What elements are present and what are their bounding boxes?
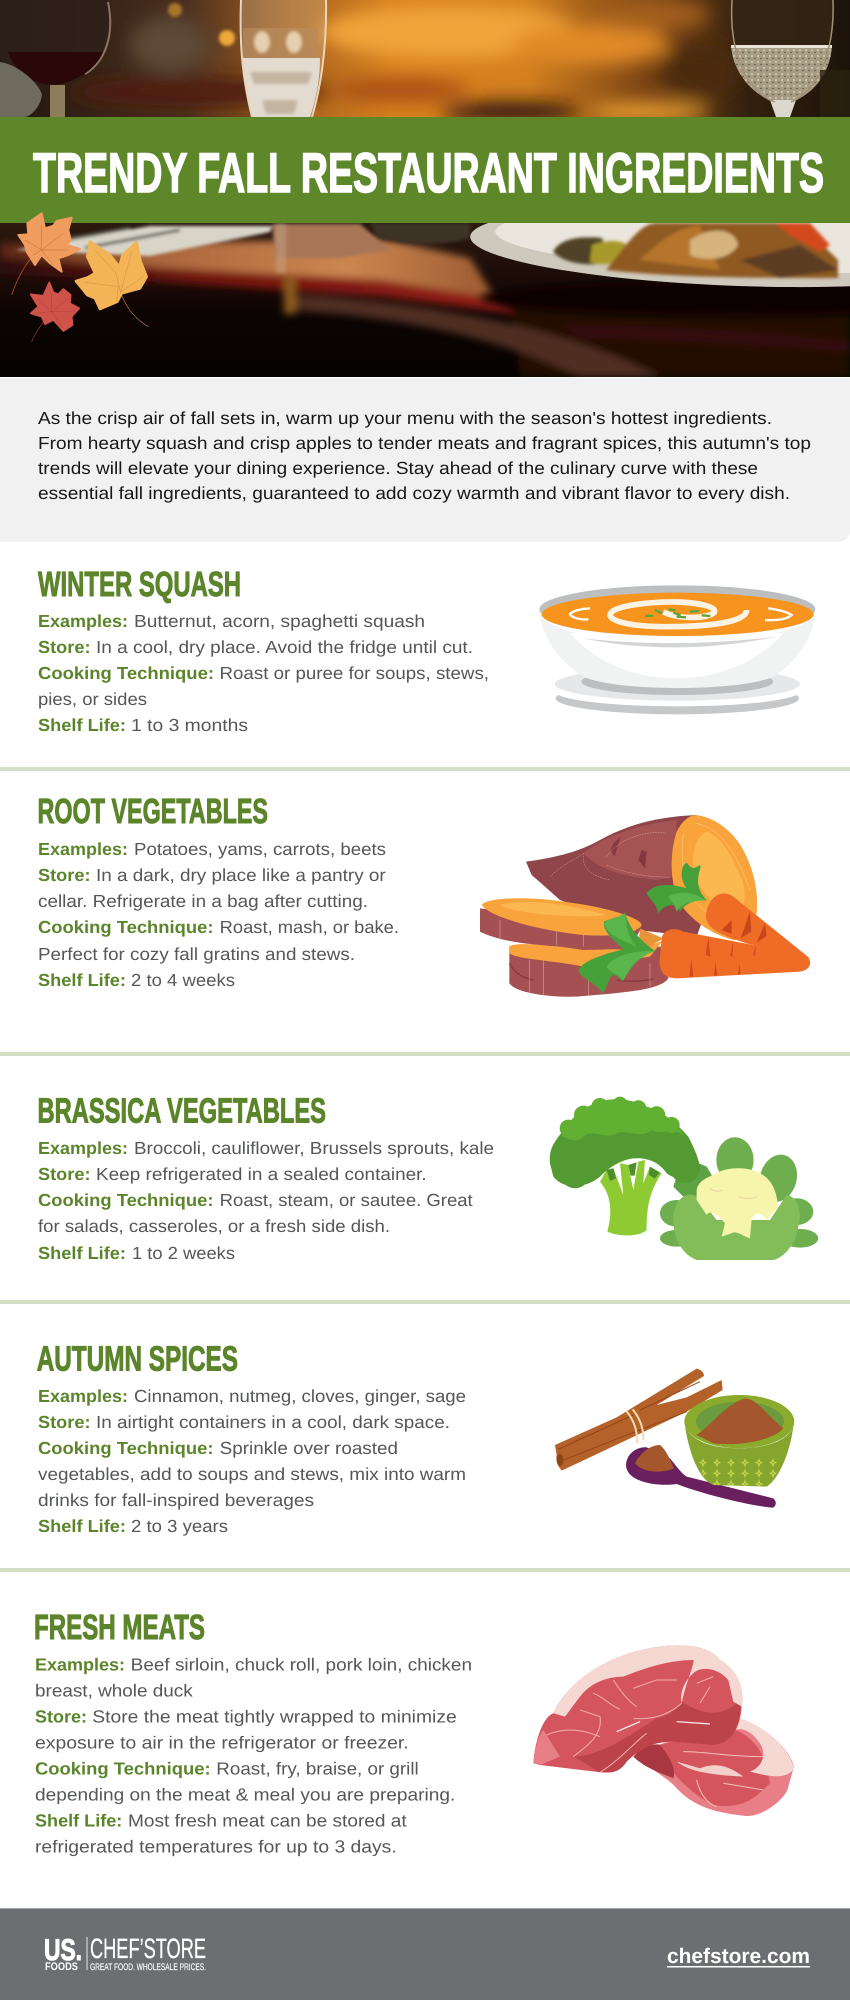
details: Examples: <box>38 839 128 859</box>
water glass right <box>731 0 833 117</box>
logo: US Foods Chef'Store: CHEF’STORE <box>90 1933 206 1964</box>
details <box>38 1138 494 1263</box>
logo: US Foods Chef'Store: FOODS <box>45 1961 78 1973</box>
website link: chefstore.com <box>667 1945 810 1968</box>
details: Broccoli, cauliflower, Brussels sprouts, kale <box>134 1138 494 1158</box>
details: Examples: <box>38 1386 128 1406</box>
details: Shelf Life: <box>38 1516 126 1536</box>
section: fresh meats <box>34 1608 794 1857</box>
slice front <box>480 908 642 950</box>
details: Cooking Technique: <box>38 917 214 937</box>
orange maple leaf <box>12 213 80 295</box>
section: brassica vegetables <box>38 1092 818 1263</box>
details: Shelf Life: <box>35 1811 122 1831</box>
details: refrigerated temperatures for up to 3 days. <box>35 1837 397 1857</box>
details <box>35 1655 472 1857</box>
cauliflower back leaves <box>660 1137 818 1248</box>
cinnamon sticks <box>555 1369 723 1471</box>
hero photo: restaurant table <box>0 0 850 377</box>
water glass centre <box>241 0 326 117</box>
details: 1 to 3 months <box>131 715 248 735</box>
intro text: From hearty squash and crisp apples to tender meats and fragrant spices, this autumn's top <box>38 433 811 453</box>
details: In a cool, dry place. Avoid the fridge until cut. <box>96 637 473 657</box>
icon: cinnamon and spice bowl <box>555 1369 794 1508</box>
front steak <box>533 1645 742 1773</box>
details: Cooking Technique: <box>38 1190 214 1210</box>
details: In airtight containers in a cool, dark space. <box>96 1412 450 1432</box>
divider <box>0 1300 850 1304</box>
icon: soup bowl <box>539 585 816 714</box>
details: Store: <box>38 637 90 657</box>
details: Examples: <box>38 611 128 631</box>
details: Cinnamon, nutmeg, cloves, ginger, sage <box>134 1386 466 1406</box>
title band <box>0 117 850 223</box>
heading: AUTUMN SPICES <box>37 1340 238 1379</box>
details: exposure to air in the refrigerator or freezer. <box>35 1733 409 1753</box>
spice bowl <box>684 1395 794 1448</box>
autumn leaves <box>12 213 148 342</box>
table surface <box>0 240 850 377</box>
details: Roast, mash, or bake. <box>220 917 399 937</box>
intro text <box>38 408 811 503</box>
divider <box>0 767 850 771</box>
sweet potato <box>526 815 713 937</box>
details: Shelf Life: <box>38 715 126 735</box>
details: for salads, casseroles, or a fresh side dish. <box>38 1216 390 1236</box>
details: Roast or puree for soups, stews, <box>220 663 489 683</box>
intro panel <box>0 378 850 542</box>
details: Store the meat tightly wrapped to minimize <box>92 1707 457 1727</box>
details: drinks for fall-inspired beverages <box>38 1490 314 1510</box>
logo: US Foods Chef'Store: US. <box>44 1934 82 1967</box>
details: Cooking Technique: <box>38 663 214 683</box>
spoon <box>626 1447 776 1508</box>
details: Shelf Life: <box>38 1243 126 1263</box>
wine glass left <box>0 0 111 117</box>
details: Butternut, acorn, spaghetti squash <box>134 611 425 631</box>
details: Store: <box>38 1164 90 1184</box>
plate <box>470 223 850 318</box>
divider <box>0 1568 850 1572</box>
details: Roast, fry, braise, or grill <box>216 1759 419 1779</box>
details <box>38 1386 466 1536</box>
details: Roast, steam, or sautee. Great <box>220 1190 473 1210</box>
details: Examples: <box>35 1655 125 1675</box>
heading: ROOT VEGETABLES <box>38 792 268 831</box>
napkin and cutlery <box>15 223 470 273</box>
details: Most fresh meat can be stored at <box>128 1811 407 1831</box>
section: winter squash <box>38 565 816 735</box>
details: cellar. Refrigerate in a bag after cutting. <box>38 891 368 911</box>
section: autumn spices <box>37 1340 794 1536</box>
intro text: trends will elevate your dining experience. Stay ahead of the culinary curve with these <box>38 458 758 478</box>
icon: raw steaks <box>533 1645 794 1816</box>
yellow leaf <box>76 242 148 327</box>
details: Store: <box>35 1707 87 1727</box>
intro text: As the crisp air of fall sets in, warm up your menu with the season's hottest ingredients. <box>38 408 772 428</box>
details: In a dark, dry place like a pantry or <box>96 865 386 885</box>
photo top: glasses and warm bokeh <box>0 0 850 122</box>
details: depending on the meat & meal you are preparing. <box>35 1785 455 1805</box>
intro text: essential fall ingredients, guaranteed to add cozy warmth and vibrant flavor to every dish. <box>38 483 790 503</box>
details <box>38 839 399 990</box>
details: vegetables, add to soups and stews, mix into warm <box>38 1464 466 1484</box>
details: pies, or sides <box>38 689 147 709</box>
details: 2 to 4 weeks <box>131 970 235 990</box>
logo: US Foods Chef'Store <box>44 1933 206 1973</box>
heading: BRASSICA VEGETABLES <box>38 1092 326 1130</box>
photo bottom: table and plate <box>0 223 850 377</box>
icon: broccoli and cauliflower <box>550 1097 818 1260</box>
details: Shelf Life: <box>38 970 126 990</box>
heading: WINTER SQUASH <box>38 565 241 604</box>
icon: sweet potato and carrots <box>480 815 810 997</box>
slice back <box>509 947 668 997</box>
details: 1 to 2 weeks <box>132 1243 235 1263</box>
details: Store: <box>38 1412 90 1432</box>
details: Examples: <box>38 1138 128 1158</box>
broccoli <box>550 1097 700 1235</box>
details: Potatoes, yams, carrots, beets <box>134 839 386 859</box>
food on plate <box>553 223 838 278</box>
back steak <box>637 1718 794 1816</box>
logo: US Foods Chef'Store: GREAT FOOD. WHOLESALE PRICES. <box>90 1962 206 1973</box>
red maple leaf <box>31 282 79 342</box>
carrot back <box>706 893 810 958</box>
footer <box>0 1908 850 2000</box>
details: Store: <box>38 865 90 885</box>
details <box>38 611 489 735</box>
details: Perfect for cozy fall gratins and stews. <box>38 944 355 964</box>
divider <box>0 1052 850 1056</box>
details: Sprinkle over roasted <box>220 1438 398 1458</box>
details: Cooking Technique: <box>35 1759 211 1779</box>
details: Cooking Technique: <box>38 1438 214 1458</box>
carrot greens <box>647 863 707 913</box>
details: breast, whole duck <box>35 1681 193 1701</box>
section: root vegetables <box>38 792 810 997</box>
details: 2 to 3 years <box>131 1516 228 1536</box>
heading: FRESH MEATS <box>34 1608 205 1647</box>
cauliflower <box>673 1168 800 1260</box>
details: Keep refrigerated in a sealed container. <box>96 1164 427 1184</box>
carrot front <box>660 929 810 978</box>
details: Beef sirloin, chuck roll, pork loin, chicken <box>131 1655 472 1675</box>
